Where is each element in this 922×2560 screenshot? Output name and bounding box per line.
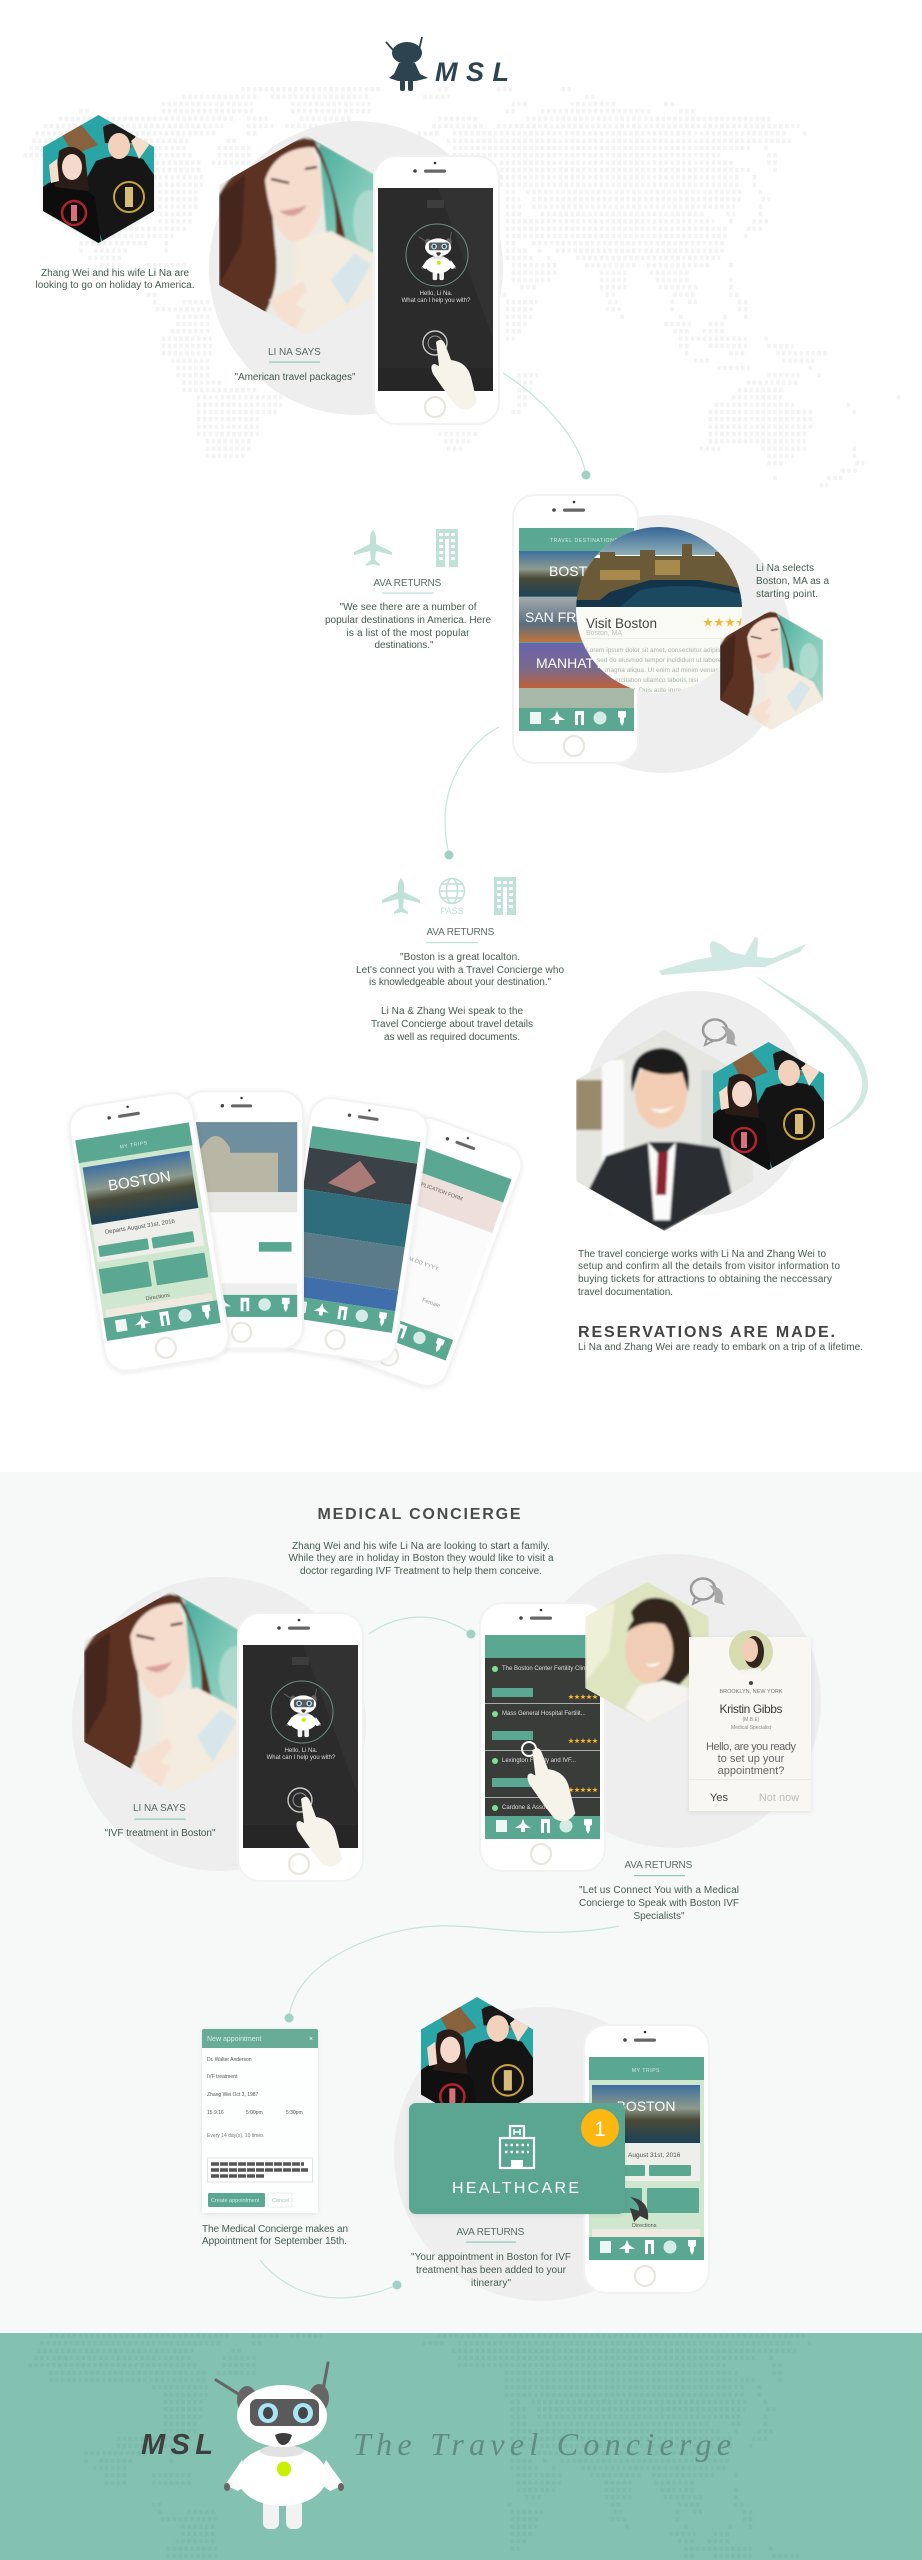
photo: couple hexagon [43, 115, 154, 243]
phone: search results: ★★★★★ [568, 1694, 598, 1701]
text: concierge description: setup and confirm all the details from visitor information to [578, 1261, 840, 1272]
phone: application form: APPLICATION FORM [413, 1179, 463, 1203]
photo: Li Na hexagon [84, 1591, 259, 1792]
icon: globe passport: PASS [440, 906, 464, 916]
arrow: curve to Boston [444, 727, 499, 860]
text: selects Boston: starting point. [756, 589, 818, 600]
label: AVA RETURNS [374, 578, 442, 589]
phone: assistant [238, 1613, 363, 1881]
phone: search results [480, 1603, 605, 1871]
panel: new appointment form: Dr. Walter Anderson [207, 2057, 252, 2063]
notes box [208, 2158, 312, 2182]
quote: popular destinations in America. Here [325, 615, 491, 626]
icon: chat bubbles [691, 1578, 725, 1605]
photo: couple hexagon [713, 1042, 824, 1170]
text: selects Boston: Boston, MA as a [756, 576, 829, 587]
icon: robot logo [386, 37, 428, 91]
phone: search results: ★★★★★ [568, 1787, 598, 1794]
phone: my trips: Departs August 31st, 2016 [105, 1219, 176, 1236]
text: appointment made: The Medical Concierge makes an [202, 2224, 348, 2235]
icon: big plane [659, 937, 806, 975]
text: appointment made: Appointment for September 15th. [202, 2236, 347, 2247]
panel: new appointment form: Zhang Wei Oct 3, 1987 [207, 2092, 259, 2098]
phone: application form: Male [381, 1283, 394, 1293]
panel: IVF request [72, 1577, 366, 1881]
card: Kristin Gibbs: Yes [710, 1792, 728, 1804]
quote: "Boston is a great localton. [400, 952, 520, 963]
label: LI NA SAYS [133, 1803, 187, 1814]
intro text: Zhang Wei and his wife Li Na are [41, 268, 189, 279]
magnifier: Visit Boston: magna aliqua. Ut enim ad minim veniam [605, 667, 721, 674]
panel: new appointment form: New appointment [207, 2036, 262, 2043]
panel: AVA returns concierge connection [356, 877, 564, 1043]
wordmark: MSL [435, 57, 509, 87]
panel: new appointment form: Create appointment [211, 2198, 260, 2204]
phone: my trips [66, 1090, 232, 1374]
phone: search results: ★★★★★ [568, 1738, 598, 1745]
panel: medical concierge section background [0, 1472, 922, 2333]
quote: "IVF treatment in Boston" [104, 1828, 216, 1839]
magnifier: Visit Boston: ercitation ullamco laboris nisi [615, 677, 698, 684]
card: Kristin Gibbs: (M.B.E) [743, 1717, 760, 1723]
phone: assistant [374, 156, 499, 424]
phone: destination list: BOSTON [549, 563, 608, 579]
panel: footer banner [0, 2333, 922, 2560]
phone: destination list: MANHATTAN [536, 655, 621, 671]
arrow: curve to search results [369, 1617, 476, 1638]
panel: specialist search [480, 1554, 821, 1922]
form buttons [208, 2193, 265, 2207]
quote: itinerary" [471, 2278, 511, 2289]
magnifier: Visit Boston [576, 527, 742, 693]
panel: new appointment form [202, 2029, 318, 2213]
footer wordmark: MSL [141, 2429, 213, 2461]
card: Kristin Gibbs: to set up your [718, 1753, 785, 1765]
text: selects Boston: Li Na selects [756, 563, 814, 574]
text: medical intro: While they are in holiday in Boston they would like to visit a [288, 1553, 554, 1564]
panel: new appointment form: Every 14 day(s), 10 times [207, 2133, 264, 2139]
phone: museum ticket [183, 1091, 303, 1349]
phone: search results: Cardone & Associates [502, 1805, 561, 1811]
label: AVA RETURNS [624, 1860, 694, 1871]
phone: application form: MM DD YYYY [403, 1255, 439, 1273]
intro text [36, 268, 194, 291]
background world map [24, 89, 903, 485]
icon: robot mascot [216, 2363, 344, 2529]
magnifier: Visit Boston: ut. Duis aute irure [630, 687, 682, 694]
photo: Li Na small hexagon [720, 610, 823, 730]
badge: one [581, 2109, 619, 2147]
phone: assistant: What can I help you with? [402, 298, 471, 304]
grey circle [394, 2007, 688, 2301]
icon: plane [354, 530, 392, 566]
icon: building [494, 877, 516, 915]
magnifier: Visit Boston: sed do eiusmod tempor incididunt ut labore [597, 657, 722, 664]
arrow: black curved pointer [630, 2197, 648, 2222]
magnifier: Visit Boston: ★★★★★ [703, 618, 758, 629]
card: healthcare: HEALTHCARE [452, 2180, 582, 2197]
phones: fan of app screens [66, 1090, 527, 1392]
icon: globe passport [440, 878, 465, 916]
quote: Let's connect you with a Travel Concierge who [356, 965, 564, 976]
text: speak to concierge: as well as required documents. [384, 1032, 520, 1043]
quote: Specialists" [634, 1911, 685, 1922]
text: selects Boston [756, 563, 829, 600]
photo: couple hexagon [421, 1997, 533, 2127]
card: healthcare [409, 2103, 625, 2214]
label: AVA RETURNS [426, 927, 496, 938]
panel: concierge call [576, 937, 868, 1353]
logo [386, 37, 509, 91]
phone: destination list: TRAVEL DESTINATIONS [550, 538, 618, 544]
panel: Li Na says [209, 121, 503, 424]
phone: application form: Applicant [387, 1205, 415, 1221]
panel: new appointment form: IVF treatment [207, 2074, 238, 2080]
panel: new appointment form: Cancel [272, 2198, 289, 2204]
badge: one: 1 [594, 2118, 606, 2141]
icon: building [436, 529, 458, 567]
quote: "Your appointment in Boston for IVF [411, 2252, 571, 2263]
phone: things to do [275, 1095, 431, 1365]
icon: plane [382, 878, 420, 914]
arrow: wave to appointment form [284, 1926, 619, 2022]
text: concierge description: buying tickets for attractions to obtaining the neccessary [578, 1274, 832, 1285]
phone: assistant: Hello, Li Na. [285, 1748, 318, 1754]
text: concierge description: The travel concierge works with Li Na and Zhang Wei to [578, 1249, 826, 1260]
panel: destinations phone and magnifier [513, 495, 829, 773]
text: appointment made [202, 2224, 348, 2247]
footer dot map [29, 2336, 813, 2556]
label: AVA RETURNS [456, 2227, 526, 2238]
phone: my trips: MY TRIPS [119, 1140, 148, 1150]
icon: chat bubbles [703, 1020, 737, 1046]
grey circle [527, 1554, 821, 1848]
arrow: curve to destinations [503, 373, 590, 480]
quote [325, 602, 491, 651]
plane trail [754, 975, 868, 1131]
quote [411, 2252, 571, 2289]
photo: doctor hexagon [585, 1582, 709, 1723]
intro text: looking to go on holiday to America. [36, 280, 194, 291]
phone: application form [329, 1112, 527, 1392]
grey circle [534, 515, 792, 773]
heading: medical concierge: MEDICAL CONCIERGE [318, 1506, 521, 1523]
quote: is knowledgeable about your destination." [369, 977, 551, 988]
grey circle [72, 1577, 366, 1871]
photo: travel concierge hexagon [576, 1030, 753, 1231]
text: medical intro [288, 1541, 554, 1577]
photo: Li Na hexagon [219, 135, 393, 335]
panel: AVA returns destinations [325, 529, 491, 651]
quote [356, 952, 564, 988]
label: Li Na says: LI NA SAYS [268, 347, 322, 358]
magnifier: Visit Boston: Visit Boston [586, 616, 657, 631]
phone: my trips: MY TRIPS [632, 2068, 660, 2074]
quote: is a list of the most popular [346, 628, 470, 639]
phone: application form: Female [421, 1298, 441, 1310]
icon: hospital building [500, 2126, 534, 2168]
text: speak to concierge: Travel Concierge about travel details [371, 1019, 533, 1030]
card: Kristin Gibbs: Not now [759, 1792, 799, 1804]
card: Kristin Gibbs: Hello, are you ready [706, 1741, 796, 1753]
avatar [729, 1630, 773, 1674]
panel: new appointment form: 15.9.16 [207, 2110, 224, 2116]
card: Kristin Gibbs: appointment? [718, 1765, 784, 1777]
card: Kristin Gibbs: Medical Specialist [731, 1725, 772, 1731]
form header [202, 2029, 318, 2048]
phone: my trips: Directions [632, 2223, 657, 2229]
panel: new appointment form: × [309, 2036, 313, 2043]
quote: "Let us Connect You with a Medical [579, 1885, 739, 1896]
phone: my trips: BOSTON [617, 2098, 675, 2114]
phone: my trips: BOSTON [107, 1168, 172, 1195]
grey circle backdrop [209, 121, 503, 415]
magnifier: Visit Boston: Boston, MA [586, 630, 623, 637]
quote: "American travel packages" [234, 372, 356, 383]
panel: new appointment form: 5:00pm [246, 2110, 263, 2116]
quote: treatment has been added to your [416, 2265, 567, 2276]
quote: Concierge to Speak with Boston IVF [579, 1898, 739, 1909]
grey circle [585, 991, 809, 1215]
phone: assistant: What can I help you with? [267, 1755, 336, 1761]
quote: destinations." [374, 640, 434, 651]
text: speak to concierge [371, 1006, 533, 1043]
text: ready to embark: Li Na and Zhang Wei are ready to embark on a trip of a lifetime. [578, 1342, 863, 1353]
phone: search results: Lexington Fertility and IVF... [502, 1758, 576, 1764]
card: Kristin Gibbs: BROOKLYN, NEW YORK [719, 1689, 783, 1695]
panel: couple intro [36, 115, 194, 291]
phone: destination list: SAN FRANCISCO [525, 609, 640, 625]
phone: my trips: August 31st, 2016 [628, 2152, 681, 2159]
text: speak to concierge: Li Na & Zhang Wei speak to the [381, 1006, 523, 1017]
phone: destination list [513, 495, 640, 763]
phone: search results: Mass General Hospital Fertilit... [502, 1711, 586, 1717]
text: concierge description: travel documentation. [578, 1287, 673, 1298]
phone: search results: The Boston Center Fertility Clinic [502, 1666, 590, 1672]
panel: new appointment form: 5:30pm [286, 2110, 303, 2116]
quote: "We see there are a number of [340, 602, 477, 613]
phone: my trips: Directions [145, 1293, 171, 1302]
heading: reservations: RESERVATIONS ARE MADE. [578, 1324, 835, 1341]
magnifier: Visit Boston: Lorem ipsum dolor sit amet, consectetur adipiscing [586, 647, 733, 654]
panel: itinerary update [394, 1997, 709, 2301]
text: medical intro: Zhang Wei and his wife Li Na are looking to start a family. [292, 1541, 550, 1552]
card: Kristin Gibbs: Kristin Gibbs [720, 1702, 782, 1716]
arrow: curve to itinerary [260, 2260, 402, 2298]
card: Kristin Gibbs [689, 1630, 811, 1811]
text: concierge description [578, 1249, 840, 1298]
text: medical intro: doctor regarding IVF Treatment to help them conceive. [300, 1566, 542, 1577]
phone: my trips [584, 2025, 709, 2293]
tagline: The Travel Concierge [353, 2426, 731, 2462]
phone: assistant: Hello, Li Na. [420, 291, 453, 297]
quote [579, 1885, 739, 1922]
